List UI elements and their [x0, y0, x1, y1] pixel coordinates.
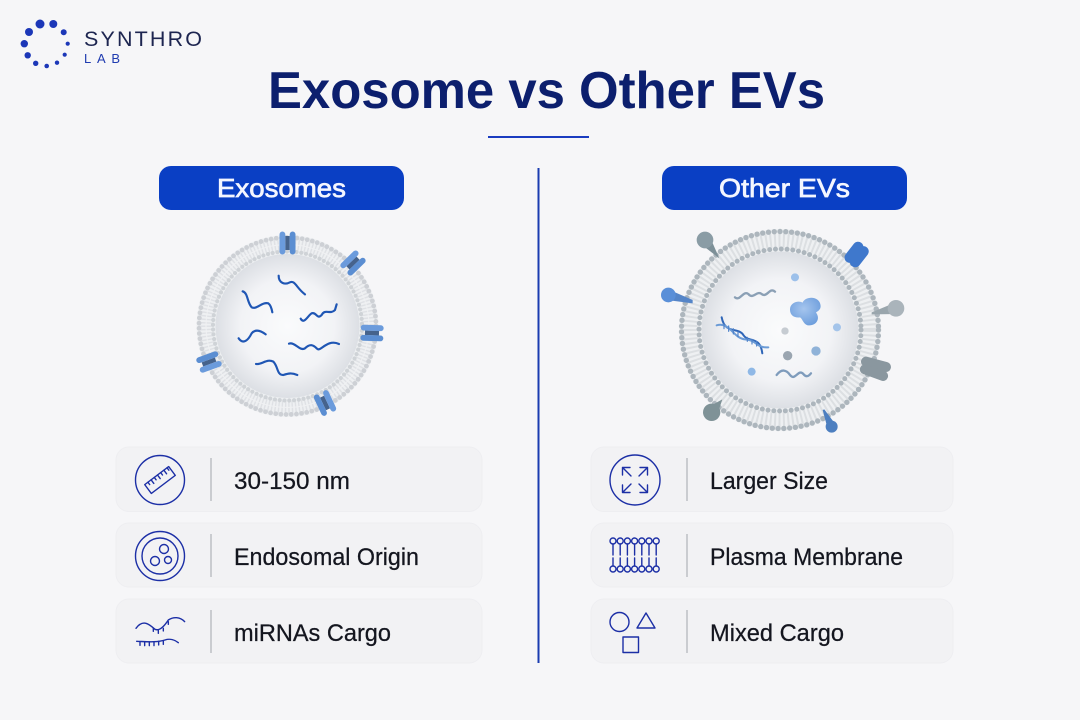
title: Exosome vs Other EVs [268, 62, 825, 120]
heading pill: Exosomes: Exosomes [217, 173, 346, 203]
panel: other EVs [591, 166, 953, 663]
DNA helix [717, 317, 768, 353]
icon: lipid bilayer [610, 538, 659, 572]
icon: expand arrows [610, 455, 660, 505]
row: size [591, 447, 953, 512]
label: size: 30-150 nm [234, 468, 350, 495]
label: membrane: Plasma Membrane [710, 544, 903, 571]
label: cargo: Mixed Cargo [710, 620, 844, 647]
label: origin: Endosomal Origin [234, 544, 419, 571]
logo mark: ring of dots [21, 20, 70, 68]
miRNA strands [239, 276, 339, 375]
icon: shapes [610, 612, 655, 652]
title underline [488, 136, 589, 138]
surface proteins [661, 232, 904, 433]
center divider [538, 168, 540, 663]
protein blob [790, 298, 821, 325]
membrane proteins [195, 232, 384, 417]
membrane and lumen [679, 229, 881, 431]
icon: miRNA [136, 618, 185, 646]
panel: exosomes [116, 166, 482, 663]
row: membrane [591, 523, 953, 587]
cargo: RNA, DNA, protein, particles [717, 273, 841, 377]
logo: Synthro Lab [21, 20, 202, 68]
row: origin [116, 523, 482, 587]
row: size [116, 447, 482, 512]
icon: endosome [136, 532, 184, 580]
other EV vesicle illustration [661, 229, 904, 433]
heading pill: Other EVs: Other EVs [719, 173, 850, 203]
heading pill: Other EVs [662, 166, 907, 210]
logo wordmark: SYNTHRO [84, 27, 202, 51]
label: size: Larger Size [710, 468, 828, 495]
label: cargo: miRNAs Cargo [234, 620, 391, 647]
icon: ruler [136, 456, 184, 504]
row: cargo [591, 599, 953, 663]
row: cargo [116, 599, 482, 663]
membrane and lumen [196, 235, 378, 417]
exosome vesicle illustration [195, 232, 384, 417]
logo sub-wordmark: LAB [84, 51, 120, 66]
heading pill: Exosomes [159, 166, 404, 210]
